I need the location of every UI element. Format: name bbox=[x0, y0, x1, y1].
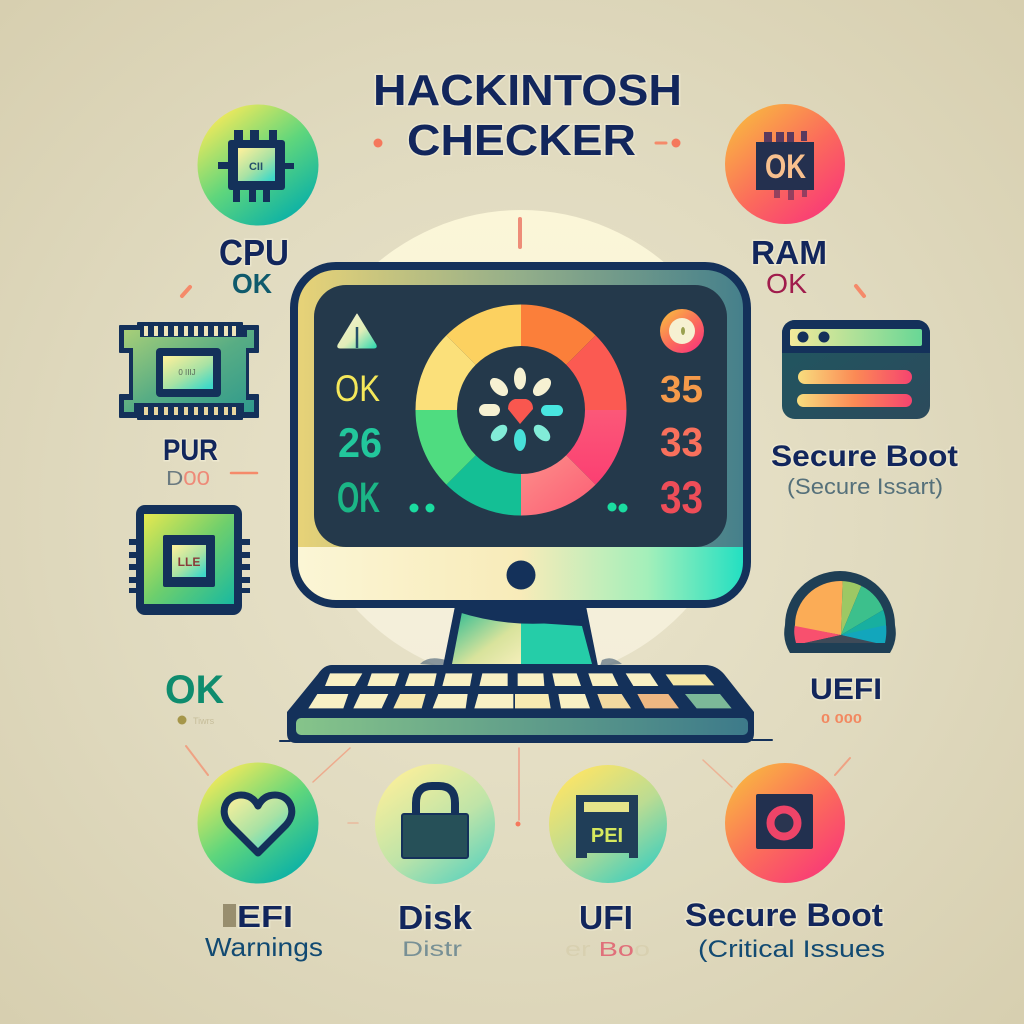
label: Secure Boot right bbox=[771, 440, 958, 499]
icon: square record bbox=[756, 794, 813, 849]
monitor bezel bbox=[294, 266, 747, 604]
donut chart bbox=[416, 304, 627, 516]
label: green OK: Tiwrs bbox=[193, 716, 215, 726]
title: CHECKER bbox=[407, 116, 636, 165]
label: EFI Warnings bbox=[205, 899, 323, 962]
label: RAM OK bbox=[751, 234, 827, 299]
status item: Disk bbox=[375, 764, 495, 884]
label: Disk: Distr bbox=[402, 938, 462, 961]
screen right readouts: 33 bbox=[660, 472, 703, 523]
label: Disk: Disk bbox=[398, 899, 473, 936]
label: Secure Boot critical issues bbox=[685, 897, 885, 963]
screen right readouts: 35 bbox=[660, 369, 703, 411]
status item: CPU bbox=[198, 104, 318, 226]
label: green OK: OK bbox=[165, 668, 224, 712]
status item: EFI warnings bbox=[198, 762, 318, 884]
status item: RAM bbox=[725, 104, 845, 224]
icon: PEI card: PEI bbox=[591, 825, 623, 847]
label: UFI: UFI bbox=[579, 899, 633, 936]
icon: motherboard chip: 0 IIIJ bbox=[178, 368, 196, 377]
label: CPU OK: OK bbox=[232, 268, 272, 299]
screen right readouts bbox=[608, 309, 704, 523]
keyboard bbox=[287, 665, 754, 743]
label: Secure Boot right: (Secure Issart) bbox=[787, 474, 943, 499]
label: Secure Boot right: Secure Boot bbox=[771, 440, 958, 473]
screen left readouts: OK bbox=[335, 368, 380, 409]
label: PUR: PUR bbox=[163, 434, 218, 467]
label: EFI Warnings: Warnings bbox=[205, 932, 323, 962]
screen bbox=[314, 285, 727, 547]
icon: processor chip bbox=[129, 505, 250, 615]
monitor power button bbox=[506, 560, 536, 590]
screen left readouts: OK bbox=[337, 474, 380, 522]
halo behind monitor bbox=[293, 210, 749, 682]
status item: Secure Boot critical bbox=[725, 763, 845, 883]
icon: motherboard chip bbox=[120, 323, 258, 419]
label: EFI Warnings: EFI bbox=[237, 899, 293, 934]
loading spinner with heart bbox=[479, 368, 563, 451]
label: UEFI bbox=[810, 673, 882, 726]
keyboard keys bbox=[308, 673, 732, 708]
monitor bbox=[294, 266, 747, 666]
label: PUR: D00 bbox=[166, 468, 210, 490]
icon: RAM chip: OK bbox=[765, 148, 806, 186]
accent lines and dots bbox=[182, 138, 864, 826]
icon: browser window bbox=[782, 320, 930, 419]
title: HACKINTOSH bbox=[373, 66, 682, 115]
screen left readouts: 26 bbox=[338, 419, 382, 466]
infographic canvas bbox=[56, 54, 969, 970]
icon: processor chip: LLE bbox=[178, 555, 200, 569]
label: UEFI: 0 000 bbox=[821, 711, 862, 726]
screen left readouts bbox=[335, 314, 434, 522]
icon: CPU chip: CII bbox=[249, 161, 263, 173]
keyboard front bar bbox=[296, 718, 748, 735]
icon: padlock bbox=[402, 786, 468, 858]
label: CPU OK bbox=[219, 232, 289, 299]
label: PUR bbox=[163, 434, 218, 490]
label: RAM OK: RAM bbox=[751, 234, 827, 271]
icon: heart bbox=[224, 795, 292, 853]
label: CPU OK: CPU bbox=[219, 232, 289, 273]
label: UFI: er Bo o bbox=[565, 939, 650, 961]
title bbox=[373, 66, 682, 165]
label: UEFI: UEFI bbox=[810, 673, 882, 706]
label: Secure Boot critical issues: (Critical Issues bbox=[698, 936, 885, 963]
status item: UFI bbox=[549, 765, 667, 883]
label: UFI bbox=[565, 899, 650, 961]
label: Secure Boot critical issues: Secure Boot bbox=[685, 897, 883, 933]
label: RAM OK: OK bbox=[766, 268, 807, 299]
icon: gauge bbox=[780, 570, 900, 653]
monitor stand bbox=[420, 606, 622, 666]
screen right readouts: 33 bbox=[660, 419, 703, 465]
label: Disk bbox=[398, 899, 473, 961]
